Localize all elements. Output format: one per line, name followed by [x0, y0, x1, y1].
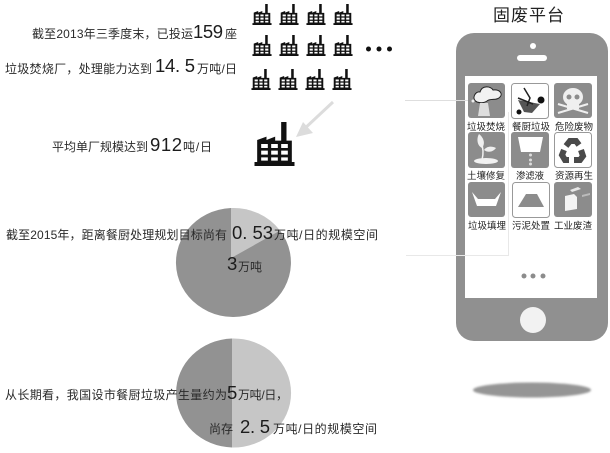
pie label: 3: 3	[227, 253, 237, 274]
pie label: 3: 万吨	[238, 260, 262, 274]
pie chart: 2015 kitchen waste target	[176, 208, 291, 317]
label: 餐厨垃圾	[512, 121, 550, 133]
app: sludge treatment	[512, 182, 550, 232]
text: incineration plants line 1: 座	[225, 26, 237, 41]
text: incineration plants line 2: 14. 5	[155, 55, 195, 76]
app: industrial residue	[554, 182, 592, 232]
label: 土壤修复	[467, 170, 505, 182]
phone camera and speaker	[517, 43, 547, 61]
text: incineration plants line 2	[5, 55, 237, 76]
pie chart: long-term kitchen waste	[176, 338, 291, 448]
app: incineration	[467, 83, 505, 133]
text: remaining capacity: 2. 5	[240, 416, 270, 437]
text: 2015 planning gap: 0. 53	[232, 222, 273, 243]
arrow: merge to single plant	[296, 102, 333, 137]
app: soil remediation	[467, 132, 505, 182]
app: resource recycling	[554, 132, 593, 182]
app: landfill	[468, 182, 506, 232]
text: long-term output: 从长期看，我国设市餐厨垃圾产生量约为	[5, 387, 227, 402]
label: 工业废渣	[554, 220, 592, 232]
label: 危险废物	[555, 121, 593, 133]
text: long-term output: 万吨/日，	[238, 388, 288, 402]
label: 污泥处置	[512, 220, 550, 232]
phone body	[456, 33, 608, 341]
text: average plant scale: 吨/日	[183, 140, 212, 154]
phone screen	[465, 76, 597, 298]
app: hazardous waste	[554, 83, 593, 133]
text: remaining capacity: 尚存	[209, 422, 233, 436]
text: 2015 planning gap: 截至2015年，距离餐厨处理规划目标尚有	[6, 227, 227, 242]
text: remaining capacity: 万吨/日的规模空间	[273, 421, 377, 436]
text: incineration plants line 2: 垃圾焚烧厂，处理能力达到	[5, 61, 152, 76]
text: 2015 planning gap	[6, 222, 378, 243]
text: incineration plants line 1: 截至2013年三季度末，已投运	[32, 26, 193, 41]
label: 渗滤液	[516, 170, 544, 182]
label: 垃圾焚烧	[467, 121, 505, 133]
text: incineration plants line 1: 159	[193, 21, 223, 42]
connector line bottom	[406, 112, 508, 256]
phone	[456, 33, 608, 341]
text: incineration plants line 1	[32, 21, 237, 42]
page dots	[522, 274, 546, 278]
app: kitchen waste	[512, 84, 550, 133]
text: 2015 planning gap: 万吨/日的规模空间	[274, 227, 378, 242]
text: average plant scale: 平均单厂规模达到	[52, 139, 148, 154]
text: average plant scale: 912	[150, 134, 182, 155]
text: average plant scale	[52, 134, 212, 155]
connector line top	[405, 100, 472, 102]
label: 资源再生	[555, 170, 593, 182]
phone home button	[520, 307, 546, 333]
phone shadow	[473, 382, 591, 398]
app: leachate	[511, 132, 549, 182]
label: 垃圾填埋	[468, 220, 506, 232]
text: incineration plants line 2: 万吨/日	[197, 62, 237, 76]
text: remaining capacity	[209, 416, 377, 437]
ellipsis dots	[366, 46, 392, 52]
text: long-term output	[5, 382, 288, 403]
icon grid: twelve factories	[251, 4, 353, 90]
pie label: 3	[227, 253, 262, 274]
title: solid waste platform: 固废平台	[493, 6, 564, 25]
icon: large factory	[254, 122, 294, 166]
text: long-term output: 5	[227, 382, 237, 403]
